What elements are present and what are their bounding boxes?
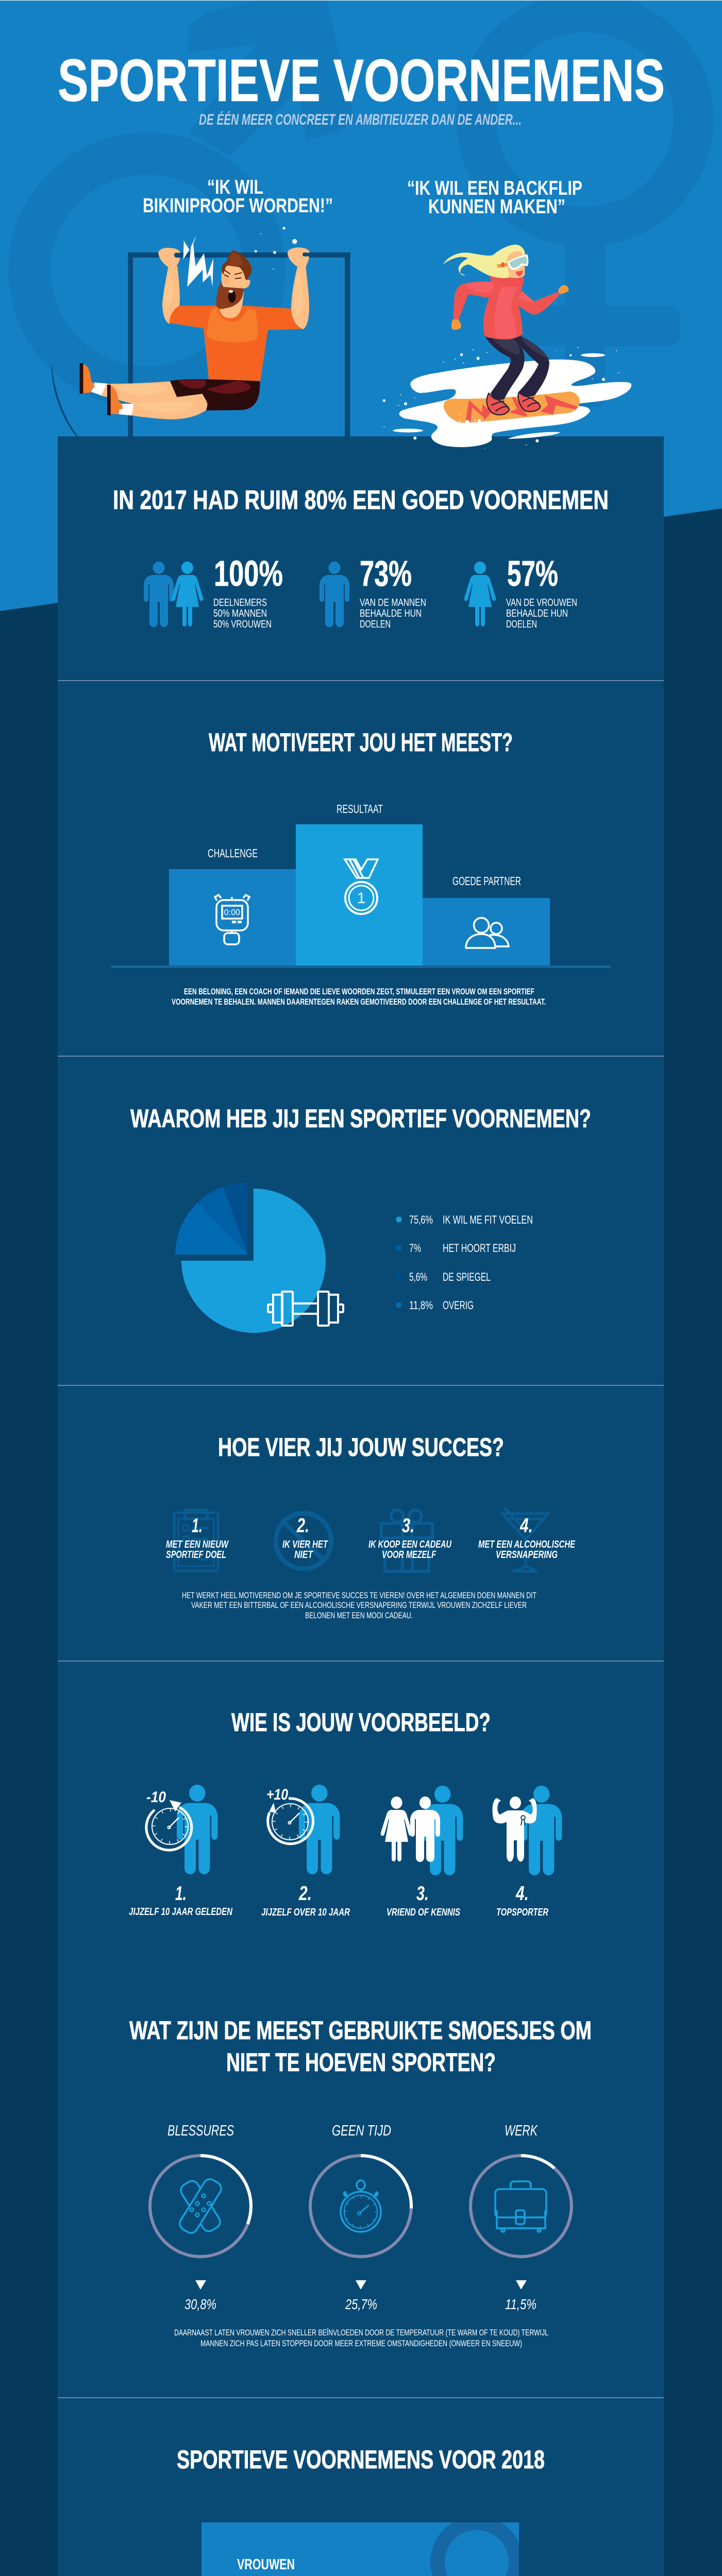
stat: 100% participants [144,553,283,630]
heading: NIET TE HOEVEN SPORTEN? [226,2048,496,2077]
label: goede partner: GOEDE PARTNER [452,874,521,888]
number and caption: 2. [298,1883,312,1905]
item 3 [368,1515,451,1561]
icon: person [299,1785,340,1874]
explanation text: MANNEN ZICH PAS LATEN STOPPEN DOOR MEER EXTREME OMSTANDIGHEDEN (ONWEER EN SNEEUW) [200,2338,522,2348]
item 4 [478,1515,575,1561]
slice: 5,6% [223,1182,247,1255]
explanation text: DAARNAAST LATEN VROUWEN ZICH SNELLER BEÏNVLOEDEN DOOR DE TEMPERATUUR (TE WARM OF TE KOUD) TERWIJL [174,2328,548,2337]
explanation text: BELONEN MET EEN MOOI CADEAU. [305,1611,413,1620]
icon: two people [466,918,509,948]
icon: female symbol [430,2522,519,2576]
explanation text [172,987,546,1007]
icon: stopwatch [215,895,249,944]
item 4: VERSNAPERING [496,1549,558,1561]
section: motivation [111,728,611,1007]
item 1: 1. [192,1515,203,1537]
caption: BEHAALDE HUN [506,608,568,619]
panel: vrouwen [202,2522,519,2576]
arrow [516,2280,527,2290]
quote: woman [407,177,582,218]
excuse: blessures [150,2123,251,2312]
caption: 50% VROUWEN [213,619,272,630]
number: 73% [360,553,412,594]
podium chart [111,802,611,968]
icon: woman [172,562,203,626]
background male symbol [29,0,355,387]
item 1 [166,1515,229,1561]
podium: challenge [169,869,296,965]
progress ring [310,2156,411,2257]
number and caption: JIJZELF 10 JAAR GELEDEN [129,1906,232,1918]
item 2 [282,1515,328,1561]
icon: woman [464,562,496,626]
explanation text: VAKER MET EEN BITTERBAL OF EEN ALCOHOLISCHE VERSNAPERING TERWIJL VROUWEN ZICHZELF LIEVER [191,1600,527,1610]
figure 3: friend [381,1786,463,1918]
legend: 11,8%: 11,8% [409,1299,433,1312]
slice: 11,8% [175,1203,247,1255]
legend: 5,6% [396,1270,491,1283]
progress ring [471,2156,572,2257]
label: +10: +10 [266,1786,288,1803]
icon: bandage [177,2177,224,2235]
icon: gift [381,1510,432,1571]
item 2: IK VIER HET [282,1539,328,1550]
icon: person [521,1786,562,1875]
legend: 5,6%: DE SPIEGEL [443,1270,491,1283]
caption: VAN DE MANNEN [360,597,426,608]
excuse: werk [471,2123,572,2312]
section: celebrate success [166,1433,575,1620]
quote: woman: KUNNEN MAKEN” [428,196,565,218]
value: 11,5% [505,2296,536,2312]
icon: briefcase [495,2181,546,2232]
icon: man [320,562,349,627]
subtitle: DE ÉÉN MEER CONCREET EN AMBITIEUZER DAN DE ANDER... [199,111,522,128]
caption [506,597,577,630]
explanation text [174,2328,548,2348]
value: 25,7% [345,2296,377,2312]
stat: 73% men [320,553,426,630]
icon: forbidden sign [276,1513,331,1569]
icon: person [422,1786,463,1875]
legend: 11,8%: OVERIG [443,1299,474,1312]
heading: WIE IS JOUW VOORBEELD? [231,1708,491,1737]
title: VROUWEN [237,2556,295,2573]
caption [213,597,272,630]
legend: 75,6%: 75,6% [409,1213,433,1226]
legend: 5,6%: 5,6% [409,1270,427,1283]
illustration: man doing pull-ups [52,227,350,437]
main content panel [58,436,664,2576]
figure 1: yourself 10 years ago [129,1785,232,1918]
stat: 57% women [464,553,577,630]
icon: white muscular athlete [493,1797,537,1862]
caption: DEELNEMERS [213,597,267,608]
caption [360,597,426,630]
progress ring [150,2156,251,2257]
number and caption [496,1883,548,1918]
legend: 75,6% [396,1213,533,1226]
background female symbol [476,12,694,407]
icon: clipboard [174,1510,218,1571]
icon: man [144,562,174,627]
label: resultaat: RESULTAAT [337,802,383,816]
explanation text: VOORNEMEN TE BEHALEN. MANNEN DAARENTEGEN RAKEN GEMOTIVEERD DOOR EEN CHALLENGE OF HET RESULTAAT. [172,997,546,1007]
label: BLESSURES [167,2123,234,2139]
quote: woman: “IK WIL EEN BACKFLIP [407,177,582,199]
icon: stopwatch: 0:00 [224,908,240,917]
icon: white man [410,1797,440,1862]
quote: man: “IK WIL [207,176,263,198]
item 3: 3. [402,1515,414,1537]
pie chart [175,1182,326,1333]
number: 100% [214,553,283,594]
podium: resultaat [296,824,423,965]
number and caption: 3. [416,1883,429,1905]
item 4: 4. [519,1515,533,1537]
number and caption [387,1883,460,1918]
quote: man: BIKINIPROOF WORDEN!” [143,195,333,217]
item 2: NIET [294,1549,313,1561]
legend [396,1213,533,1312]
arrow [195,2280,206,2290]
section: excuses [129,2016,592,2348]
icon: medal: 1 [357,890,365,907]
number and caption: 1. [175,1883,187,1905]
heading: WAT MOTIVEERT JOU HET MEEST? [209,728,513,757]
section: why [130,1104,591,1333]
caption: DOELEN [360,619,391,630]
number: 57% [507,553,558,594]
value: 30,8% [184,2296,216,2312]
icon: medal [345,859,378,914]
number and caption [129,1883,232,1918]
illustration: woman snowboarding [383,245,631,449]
section: role model [129,1708,562,1918]
item 3: VOOR MEZELF [382,1549,436,1561]
icon: white woman [381,1797,412,1861]
section: resolutions 2018 [177,2445,545,2576]
explanation text: HET WERKT HEEL MOTIVEREND OM JE SPORTIEVE SUCCES TE VIEREN! OVER HET ALGEMEEN DOEN MANNEN DIT [182,1590,536,1600]
section: 2017 statistics [113,485,609,630]
label: WERK [505,2123,538,2139]
legend: 75,6%: IK WIL ME FIT VOELEN [443,1213,533,1226]
legend: 7% [396,1242,516,1255]
slice: 7% [197,1187,247,1255]
number and caption: 4. [515,1883,529,1905]
label: GEEN TIJD [332,2123,391,2139]
legend: 11,8% [396,1299,474,1312]
explanation text [182,1590,536,1620]
label: challenge: CHALLENGE [208,846,258,860]
caption: DOELEN [506,619,537,630]
figure 2: yourself in 10 years [261,1785,350,1918]
legend: 7%: 7% [409,1242,421,1255]
card background [202,2522,519,2576]
icon: person [177,1785,217,1874]
icon: clock counter-clockwise [146,1800,192,1850]
caption: 50% MANNEN [213,608,267,619]
podium: goede partner [423,898,550,965]
quote: man [143,176,333,217]
explanation text: EEN BELONING, EEN COACH OF IEMAND DIE LIEVE WOORDEN ZEGT, STIMULEERT EEN VROUW OM EEN SPORTIEF [184,987,534,996]
heading [129,2016,592,2077]
item 2: 2. [296,1515,309,1537]
number and caption: JIJZELF OVER 10 JAAR [261,1907,350,1918]
number and caption: VRIEND OF KENNIS [387,1907,460,1918]
item 3: IK KOOP EEN CADEAU [368,1539,451,1550]
number and caption: TOPSPORTER [496,1907,548,1918]
icon: cocktail glass [502,1507,548,1571]
number and caption [261,1883,350,1918]
item 1: SPORTIEF DOEL [166,1549,226,1561]
figure 4: top athlete [493,1786,562,1918]
item 4: MET EEN ALCOHOLISCHE [478,1539,575,1550]
heading: HOE VIER JIJ JOUW SUCCES? [218,1433,504,1462]
podium base [111,965,611,968]
icon: dumbbell [268,1292,343,1326]
label: -10: -10 [146,1789,166,1806]
icon: clock clockwise [268,1799,313,1844]
arrow [356,2280,366,2290]
excuse: geen tijd [310,2123,411,2312]
caption: VAN DE VROUWEN [506,597,577,608]
item 1: MET EEN NIEUW [166,1539,229,1550]
heading: SPORTIEVE VOORNEMENS VOOR 2018 [177,2445,545,2474]
slice: 75,6% [181,1189,326,1333]
caption: BEHAALDE HUN [360,608,422,619]
icon: stopwatch [341,2180,381,2232]
legend: 7%: HET HOORT ERBIJ [443,1242,516,1255]
